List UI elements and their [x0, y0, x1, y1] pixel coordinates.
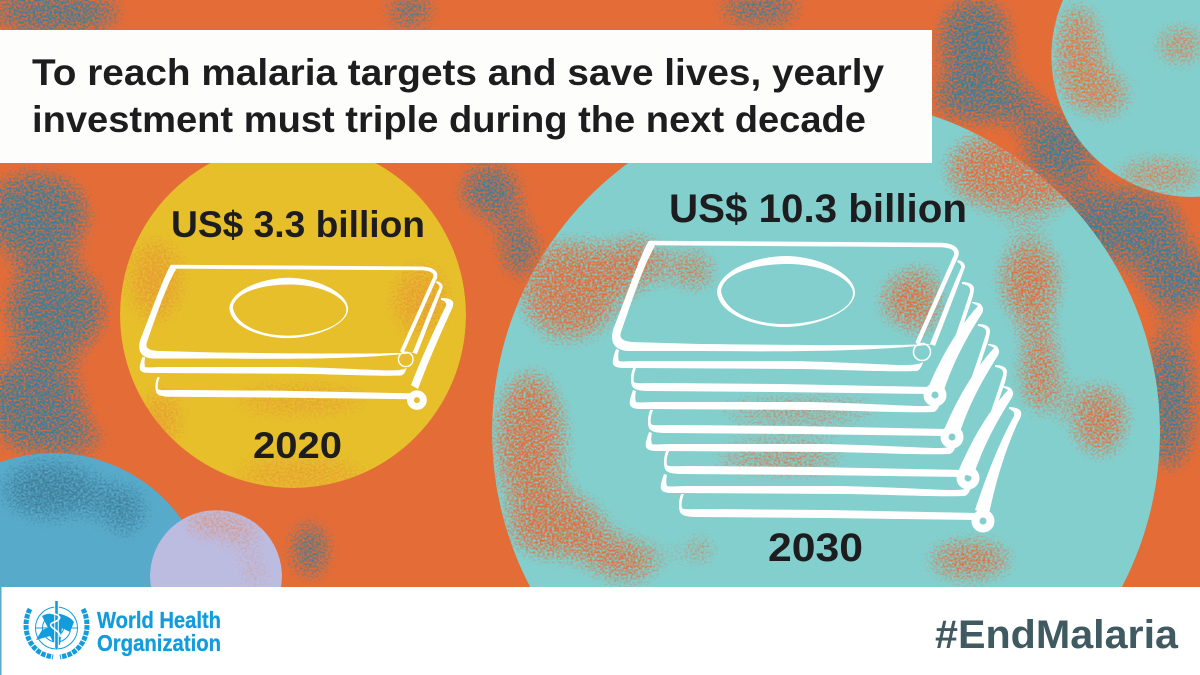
logo wordmark: World Health: [97, 607, 221, 633]
circle: lilac bottom left: [150, 504, 282, 589]
icon: banknotes 2020: [139, 265, 453, 407]
title text: investment must triple during the next decade: [32, 99, 866, 140]
icon: WHO emblem: [26, 601, 87, 657]
title text: To reach malaria targets and save lives, yearly: [32, 52, 884, 93]
circle: large teal 2030: [490, 98, 1160, 587]
logo wordmark: [97, 607, 221, 656]
label: US$ 3.3 billion: US$ 3.3 billion: [171, 204, 425, 245]
logo: World Health Organization: [26, 601, 221, 657]
logo wordmark: Organization: [97, 630, 221, 656]
circle: yellow 2020: [120, 142, 466, 495]
icon: banknotes 2030: [612, 241, 1021, 528]
footer band: [0, 587, 1200, 675]
circle: top right teal: [1050, 0, 1200, 197]
label: US$ 10.3 billion: US$ 10.3 billion: [669, 187, 967, 231]
title panel: [0, 30, 932, 163]
label: 2030: 2030: [768, 526, 863, 570]
title text: [32, 52, 884, 140]
hashtag: #EndMalaria: [935, 613, 1179, 657]
circle: blue bottom left: [0, 453, 182, 587]
label: 2020: 2020: [253, 425, 342, 466]
